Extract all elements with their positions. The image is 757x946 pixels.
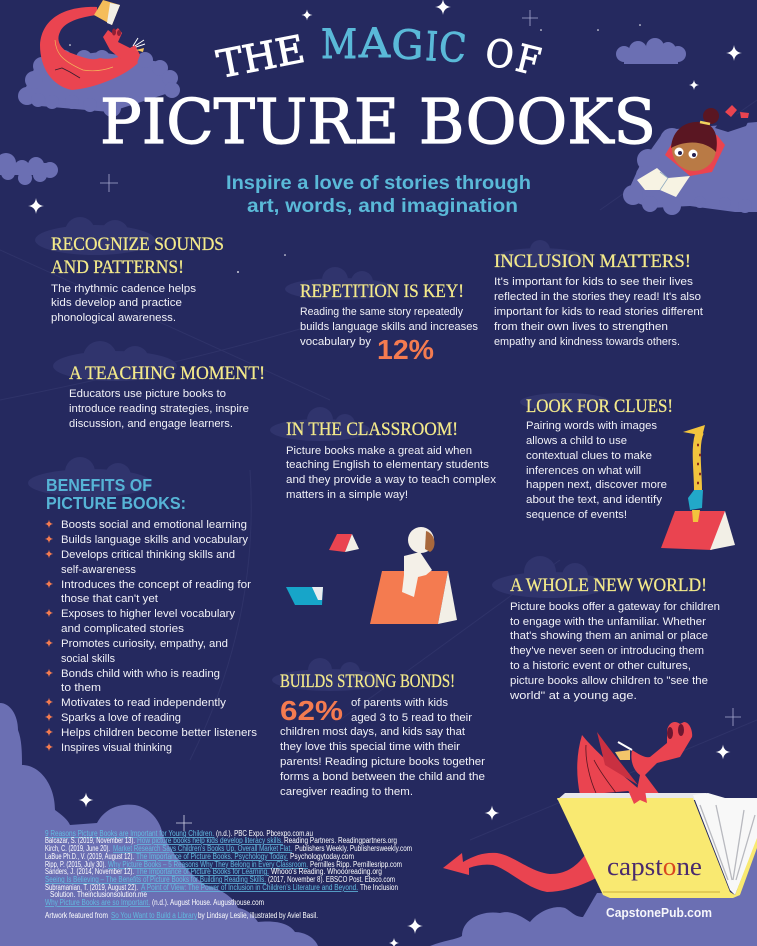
subtitle: art, words, and imagination	[247, 196, 518, 217]
heading: IN THE CLASSROOM!	[286, 419, 458, 440]
body: they've never seen or introducing them	[510, 645, 704, 657]
heading: PICTURE BOOKS:	[46, 493, 186, 513]
body: allows a child to use	[526, 435, 627, 447]
title	[100, 21, 656, 158]
references: 9 Reasons Picture Books are Important for Young Children.	[45, 829, 214, 838]
website: CapstonePub.com	[606, 905, 712, 920]
body: from their own lives to strengthen	[494, 321, 668, 333]
body: children most days, and kids say that	[280, 726, 466, 738]
benefits list: Exposes to higher level vocabulary	[61, 608, 235, 620]
body: picture books allow children to "see the	[510, 675, 708, 687]
body: Pairing words with images	[526, 420, 657, 432]
body	[280, 697, 485, 798]
references: LaBue Ph.D., V. (2019, August 12).	[45, 852, 134, 861]
benefits list: Helps children become better listeners	[61, 727, 257, 739]
body: empathy and kindness towards others.	[494, 336, 680, 348]
cloud: left small	[0, 153, 58, 185]
body: Picture books offer a gateway for children	[510, 601, 720, 613]
title line: Picture Books: PICTURE BOOKS	[100, 85, 656, 158]
body: important for kids to read stories different	[494, 306, 704, 318]
star and cross on cloud band	[78, 792, 192, 831]
body	[51, 283, 196, 324]
panel: recognize sounds and patterns	[51, 234, 224, 324]
references: Balcazar, S. (2019, November 13).	[45, 836, 135, 845]
body: parents! Reading picture books together	[280, 756, 485, 768]
references: A Point of View: The Power of Inclusion in Children's Literature and Beyond.	[141, 883, 358, 892]
heading: REPETITION IS KEY!	[300, 281, 464, 302]
cloud with girl reading	[623, 105, 757, 215]
heading: A TEACHING MOMENT!	[69, 363, 265, 384]
title line: The Magic Of: A	[358, 21, 391, 67]
references: The Importance of Picture Books for Learning.	[136, 867, 269, 876]
benefits list: social skills	[61, 653, 115, 665]
icon: small red book	[329, 534, 359, 552]
references: Publishers Weekly. Publishersweekly.com	[295, 844, 412, 853]
icon: astronaut on orange book	[370, 527, 457, 624]
panel: benefits of picture books	[45, 475, 257, 754]
body: caregiver reading to them.	[280, 786, 413, 798]
references: Pernilles Ripp. Pernillesripp.com	[310, 860, 402, 869]
body: builds language skills and increases	[300, 321, 478, 333]
body: happen next, discover more	[526, 479, 667, 491]
references: Why Picture Books are so Important.	[45, 898, 150, 907]
body	[69, 388, 249, 430]
title line: The Magic Of: F	[512, 36, 545, 84]
references: Subramanian, T. (2019, August 22).	[45, 883, 138, 892]
dragon tail arrow	[443, 853, 596, 892]
cloud: bottom band right	[430, 843, 757, 946]
benefits list	[61, 519, 257, 754]
logo: capstone	[607, 852, 702, 881]
body: It's important for kids to see their lives	[494, 276, 693, 288]
references: (n.d.). August House. Augusthouse.com	[152, 898, 264, 907]
references: Market Research Says Children's Books Up, Overall Market Flat.	[113, 844, 292, 853]
references: So You Want to Build a Library	[111, 911, 197, 920]
heading	[51, 234, 224, 278]
references: Why Picture Books – 5 Reasons Why They Belong in Every Classroom.	[108, 860, 308, 869]
benefits list: Motivates to read independently	[61, 697, 226, 709]
cloud: top right small	[616, 38, 686, 64]
benefits list: self-awareness	[61, 564, 136, 576]
body: to engage with the unfamiliar. Whether	[510, 616, 706, 628]
references	[45, 829, 412, 920]
benefits list: those that can't yet	[61, 593, 159, 605]
title line: The Magic Of: M	[321, 22, 357, 68]
benefits list: and complicated stories	[61, 623, 184, 635]
references: (n.d.). PBC Expo. Pbcexpo.com.au	[216, 829, 313, 838]
panel: a teaching moment	[69, 363, 265, 430]
heading: A WHOLE NEW WORLD!	[510, 575, 707, 596]
body: Picture books make a great aid when	[286, 445, 472, 457]
panel: a whole new world	[509, 575, 720, 702]
benefits list: Inspires visual thinking	[61, 742, 172, 754]
heading: BENEFITS OF	[46, 475, 152, 495]
body: matters in a simple way!	[286, 489, 408, 501]
body: teaching English to elementary students	[286, 459, 489, 471]
icon: girl with book	[637, 105, 750, 197]
icon: dragon on open book with capstone logo	[443, 722, 757, 920]
icon: giraffe on red book	[661, 425, 735, 550]
body	[526, 420, 667, 521]
subtitle	[226, 173, 531, 217]
body: sequence of events!	[526, 509, 627, 521]
heading: LOOK FOR CLUES!	[526, 396, 673, 417]
benefits list: Introduces the concept of reading for	[61, 579, 251, 591]
body: contextual clues to make	[526, 450, 652, 462]
body: about the text, and identify	[526, 494, 662, 506]
references: Ripp, P. (2015, July 30).	[45, 860, 106, 869]
stat: 62%: 62%	[280, 695, 343, 726]
panel: inclusion matters	[494, 251, 704, 348]
title line: The Magic Of: THE	[213, 27, 308, 87]
body: they love this special time with their	[280, 741, 460, 753]
body: Educators use picture books to	[69, 388, 226, 400]
heading: AND PATTERNS!	[51, 257, 184, 278]
body: introduce reading strategies, inspire	[69, 403, 249, 415]
body: discussion, and engage learners.	[69, 418, 233, 430]
references: Sanders, J. (2014, November 12).	[45, 867, 134, 876]
benefits list: Builds language skills and vocabulary	[61, 534, 248, 546]
faint heading clouds	[28, 217, 610, 691]
body: of parents with kids	[351, 697, 448, 709]
open book	[557, 790, 757, 898]
references: Psychologytoday.com	[290, 852, 354, 861]
references: Seeing Is Believing – The Benefits of Picture Books for Building Reading Skills.	[45, 875, 266, 884]
body	[509, 601, 720, 702]
body: The rhythmic cadence helps	[51, 283, 196, 295]
body	[494, 276, 704, 348]
body: Reading the same story repeatedly	[300, 306, 463, 318]
references: by Lindsay Leslie, illustrated by Aviel Basil.	[198, 911, 318, 920]
body: reflected in the stories they read! It's also	[494, 291, 701, 303]
body: aged 3 to 5 read to their	[351, 712, 472, 724]
body: kids develop and practice	[51, 297, 182, 309]
body: that's showing them an animal or place	[510, 630, 708, 642]
panel: builds strong bonds	[280, 671, 485, 798]
panel: look for clues	[526, 396, 673, 521]
panel: in the classroom	[286, 419, 496, 501]
title line: The Magic Of: G	[391, 22, 424, 69]
panel: repetition is key	[300, 281, 478, 365]
cloud: top left with dragon	[18, 0, 180, 117]
title line: The Magic Of: I	[424, 24, 439, 71]
references: (2017, November 8). EBSCO Post. Ebsco.com	[268, 875, 395, 884]
subtitle: Inspire a love of stories through	[226, 173, 531, 194]
title line: The Magic Of	[213, 21, 545, 87]
benefits list: Promotes curiosity, empathy, and	[61, 638, 228, 650]
references: Kirch, C. (2019, June 20).	[45, 844, 110, 853]
body: and they provide a way to teach complex	[286, 474, 496, 486]
stat: 12%: 12%	[377, 334, 434, 365]
heading: RECOGNIZE SOUNDS	[51, 234, 224, 255]
heading	[46, 475, 186, 513]
body: vocabulary by	[300, 336, 371, 348]
references: Whooo's Reading. Whoooreading.org	[271, 867, 382, 876]
icon: small blue book	[286, 587, 323, 605]
benefits list: Bonds child with who is reading	[61, 668, 220, 680]
body	[300, 306, 478, 348]
body	[286, 445, 496, 501]
bullet markers	[45, 520, 53, 751]
benefits list: to them	[61, 682, 101, 694]
title line: The Magic Of: O	[483, 30, 517, 78]
body: world" at a young age.	[509, 690, 637, 702]
body: to a historic event or other cultures,	[510, 660, 691, 672]
body: forms a bond between the child and the	[280, 771, 485, 783]
dragon wings and head	[577, 722, 692, 795]
title line: The Magic Of: C	[437, 24, 468, 72]
references: Artwork featured from	[45, 911, 108, 920]
benefits list: Boosts social and emotional learning	[61, 519, 247, 531]
references: Reading Partners. Readingpartners.org	[284, 836, 397, 845]
references: The Importance of Picture Books. Psychology Today.	[136, 852, 288, 861]
body: phonological awareness.	[51, 312, 176, 324]
cloud: bottom band left	[0, 703, 318, 946]
body: inferences on what will	[526, 465, 641, 477]
benefits list: Develops critical thinking skills and	[61, 549, 235, 561]
heading: BUILDS STRONG BONDS!	[280, 671, 455, 692]
icon: red dragon reading	[40, 0, 145, 90]
references: The Inclusion	[360, 883, 398, 892]
references: Solution. Theinclusionsolution.me	[50, 890, 147, 899]
heading: INCLUSION MATTERS!	[494, 251, 691, 272]
references: How picture books help kids develop literacy skills.	[137, 836, 283, 845]
benefits list: Sparks a love of reading	[61, 712, 181, 724]
